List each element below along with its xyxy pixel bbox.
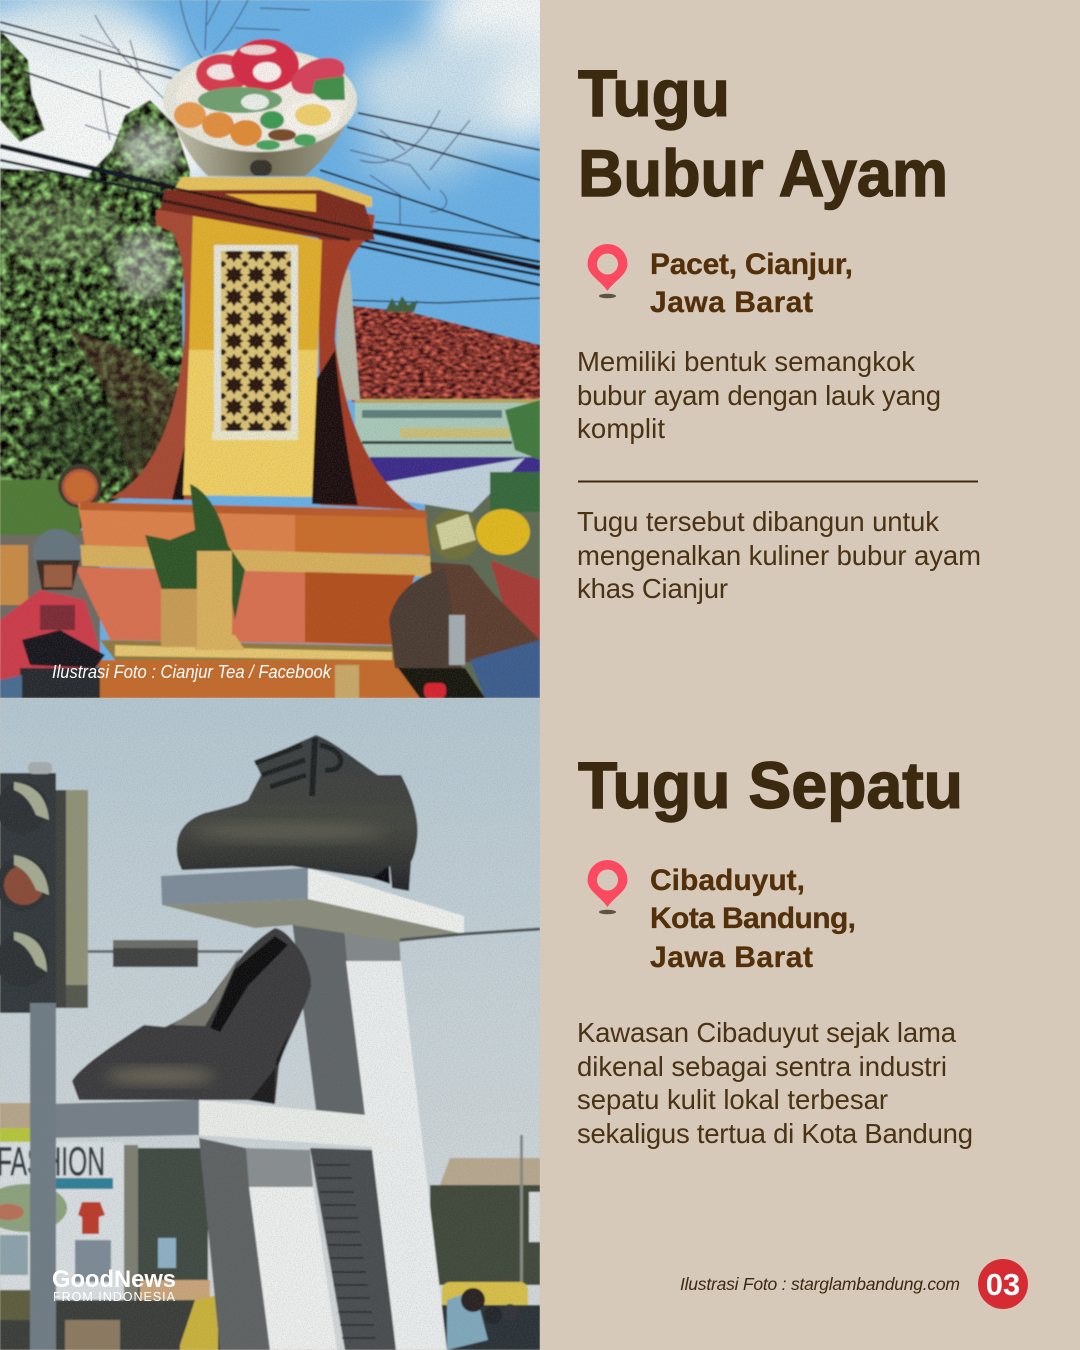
photo credit: Ilustrasi Foto : Cianjur Tea / Facebook — [52, 662, 332, 682]
text block: bentuk tugu — [577, 346, 941, 444]
text block: kawasan Cibaduyut: Kawasan Cibaduyut sejak lama — [577, 1017, 957, 1048]
panel: photo of Tugu Sepatu — [0, 698, 540, 1350]
red right flank — [318, 205, 418, 510]
text block: bentuk tugu: komplit — [577, 413, 665, 444]
upper platform — [162, 899, 464, 942]
bottom lens — [0, 933, 49, 987]
text block: tujuan tugu: khas Cianjur — [577, 573, 728, 604]
middle lens with amber — [0, 857, 49, 911]
grey band — [344, 932, 402, 962]
dark lower right with ruler — [310, 1148, 396, 1350]
location: Cibaduyut: Cibaduyut, — [650, 864, 805, 897]
location: Cibaduyut: Jawa Barat — [650, 941, 813, 974]
page number badge — [978, 1259, 1028, 1309]
icon: location pin — [588, 244, 628, 298]
heading: Tugu Bubur Ayam — [578, 56, 948, 210]
red left flank — [110, 205, 195, 500]
yellow body — [183, 210, 322, 497]
photo credit: Ilustrasi Foto : starglambandung.com — [680, 1274, 960, 1294]
sky — [0, 0, 540, 698]
icon: location pin — [588, 860, 628, 914]
background buildings left: FASHION — [0, 1140, 105, 1184]
text block: tujuan tugu: mengenalkan kuliner bubur ayam — [577, 540, 981, 571]
sky — [0, 698, 540, 1350]
street crowd — [0, 1288, 518, 1350]
location: Cibaduyut — [650, 864, 856, 974]
power lines — [0, 22, 540, 303]
stepped base — [75, 502, 432, 698]
rider left — [0, 529, 105, 698]
photo scene — [0, 0, 540, 698]
photo scene — [0, 698, 540, 1350]
riders right — [389, 509, 540, 698]
bare branches — [80, 0, 470, 225]
monument — [110, 177, 418, 510]
lattice panel — [214, 245, 298, 437]
cap — [170, 177, 372, 207]
grey upper column — [292, 920, 365, 1115]
photo grain — [0, 0, 540, 698]
panel: photo of Tugu Bubur Ayam — [0, 0, 540, 698]
sculpture: high heel — [72, 928, 311, 1104]
location: Cibaduyut: Kota Bandung, — [650, 902, 856, 935]
sculpture: men's shoe — [177, 735, 418, 891]
heading: Tugu Bubur Ayam: Tugu — [578, 56, 730, 130]
page number badge: 03 — [986, 1267, 1020, 1302]
logo: GoodNews From Indonesia: FROM INDONESIA — [53, 1290, 176, 1304]
text block: tujuan tugu — [577, 506, 981, 604]
plant and pillars — [145, 484, 245, 650]
location: Pacet, Cianjur — [650, 248, 853, 319]
lower platform — [46, 1100, 199, 1138]
banner — [355, 399, 540, 698]
background buildings left — [0, 1103, 210, 1318]
top lens — [0, 782, 48, 834]
text block: bentuk tugu: Memiliki bentuk semangkok — [577, 346, 915, 377]
text block: bentuk tugu: bubur ayam dengan lauk yang — [577, 380, 941, 411]
traffic light — [0, 762, 88, 1013]
left bush and sign — [0, 462, 103, 670]
back white strip — [336, 270, 360, 400]
wires crossing monument — [150, 183, 540, 268]
text block: kawasan Cibaduyut: sepatu kulit lokal terbesar — [577, 1084, 888, 1115]
dark opening — [312, 350, 358, 505]
sky gaps through tree — [0, 124, 180, 300]
tree foliage — [0, 20, 200, 540]
sculpture column — [46, 868, 464, 1350]
location: Pacet, Cianjur: Pacet, Cianjur, — [650, 248, 853, 281]
left lower pillar — [199, 1138, 270, 1350]
background right — [430, 1135, 540, 1350]
text block: kawasan Cibaduyut — [577, 1017, 973, 1149]
brown roof behind tree — [70, 330, 188, 480]
bowl sculpture — [163, 39, 358, 176]
heading: Tugu Bubur Ayam: Bubur Ayam — [578, 136, 948, 210]
bowl toppings — [174, 39, 350, 150]
text block: kawasan Cibaduyut: dikenal sebagai sentra industri — [577, 1051, 947, 1082]
roof tiles — [345, 300, 540, 405]
text block: kawasan Cibaduyut: sekaligus tertua di Kota Bandung — [577, 1118, 973, 1149]
photo grain — [0, 698, 540, 1350]
clouds — [0, 0, 610, 210]
small palm on roof — [385, 296, 418, 312]
text block: tujuan tugu: Tugu tersebut dibangun untuk — [577, 506, 939, 537]
logo: GoodNews From Indonesia: GoodNews — [52, 1266, 176, 1293]
heading: Tugu Sepatu: Tugu Sepatu — [578, 748, 963, 822]
white right face — [346, 961, 447, 1350]
location: Pacet, Cianjur: Jawa Barat — [650, 286, 813, 319]
pole and arm — [30, 929, 540, 1350]
